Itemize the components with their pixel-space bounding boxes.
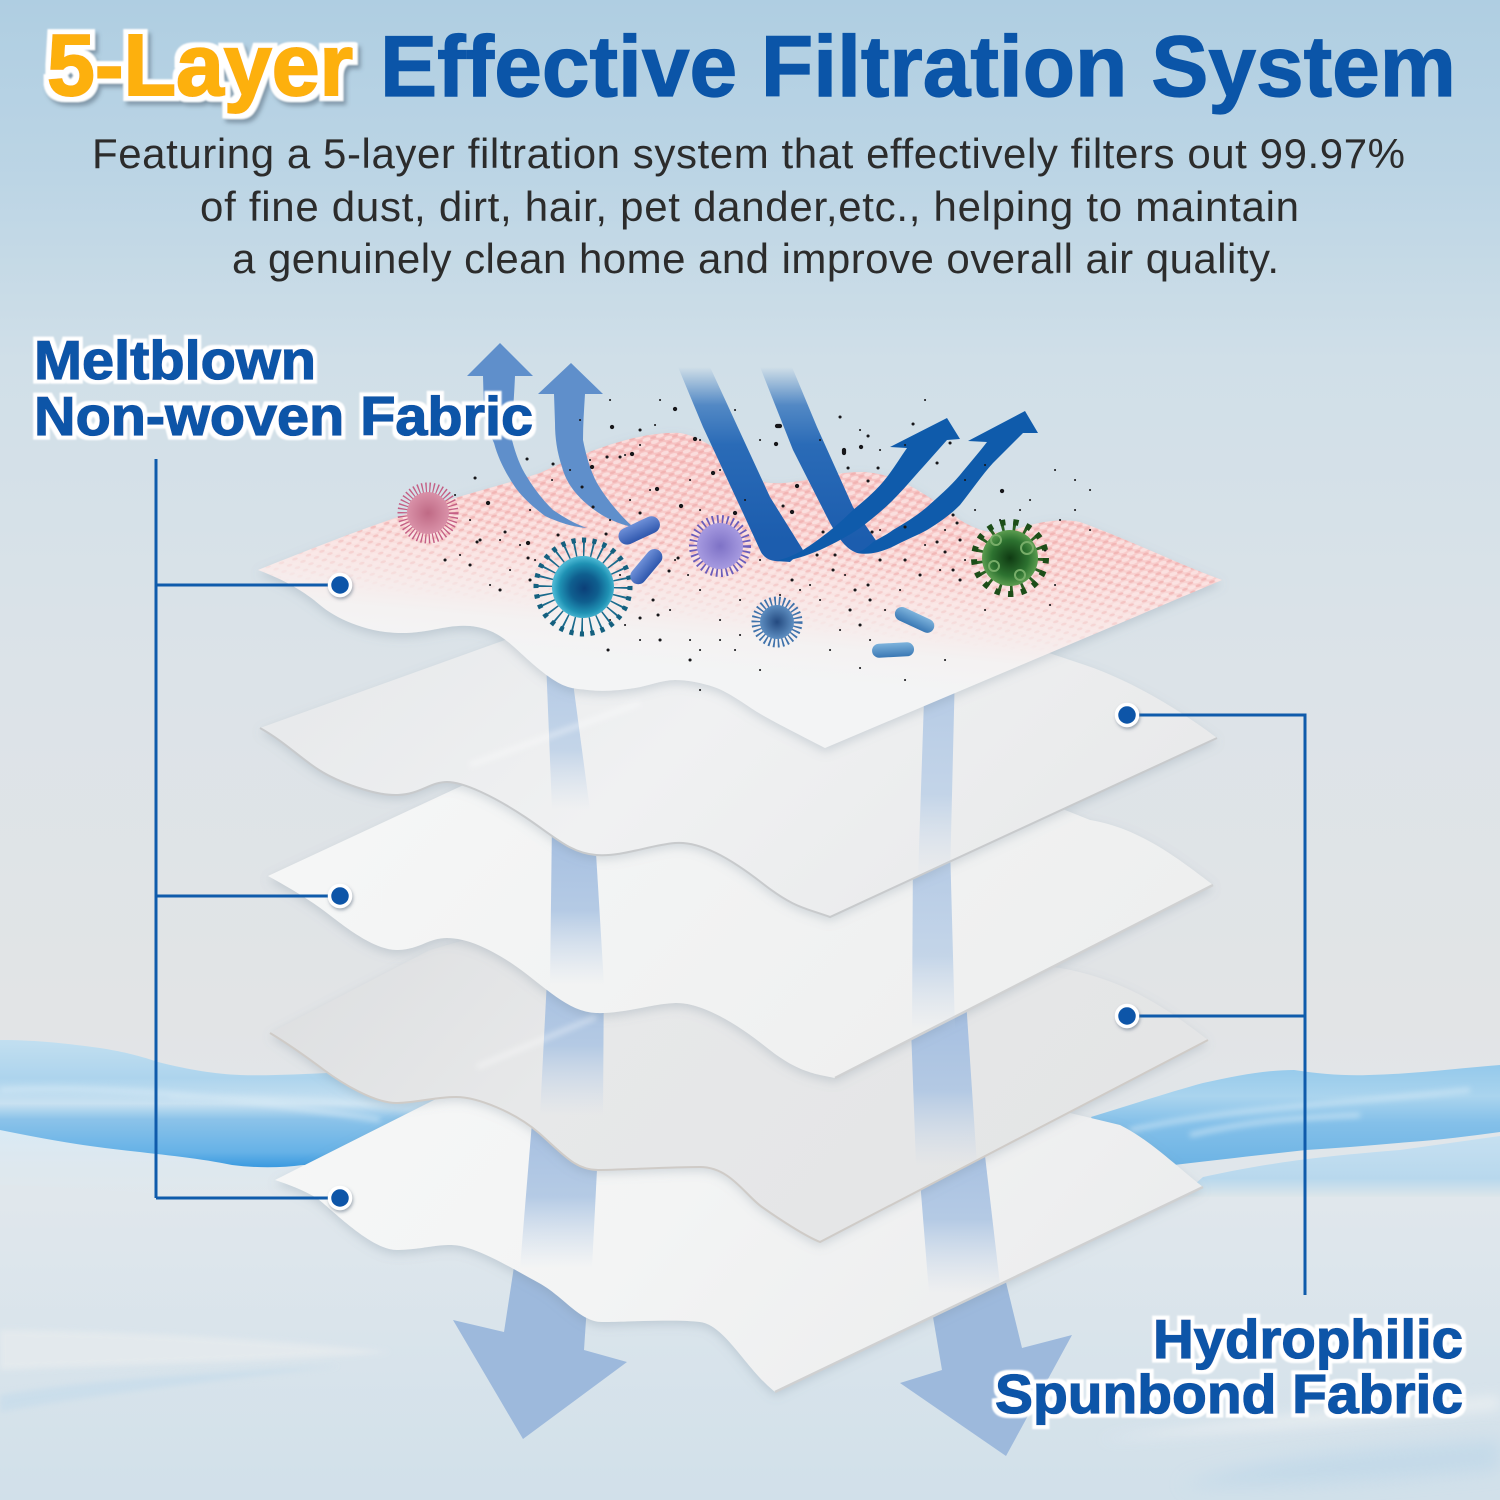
fabric highlights — [470, 703, 640, 1067]
title: Effective Filtration System — [380, 19, 1456, 115]
icon: bacterium 3 — [893, 605, 937, 635]
air stream between layers 3 and 4 — [540, 960, 977, 1165]
fabric layer 3: hydrophilic spunbond — [268, 782, 1213, 1078]
water waves background — [0, 1040, 1500, 1486]
arrow: filtered air out left — [453, 1260, 627, 1439]
air stream between layers 2 and 3 — [550, 820, 955, 1030]
fabric layer 2: meltblown — [260, 640, 1217, 917]
icon: bacterium 2 — [627, 546, 666, 587]
icon: green virus — [974, 522, 1046, 594]
intro text: a genuinely clean home and improve overall air quality. — [232, 235, 1279, 282]
icon: pink virus — [403, 488, 453, 538]
callout: spunbond connector — [1116, 704, 1305, 1295]
icon: large blue virus — [536, 540, 630, 634]
arrow: air flow in and out 2 — [760, 367, 1038, 554]
icon: bacterium 4 — [872, 642, 914, 658]
icon: bacterium 1 — [616, 513, 663, 547]
label: hydrophilic spunbond fabric: Spunbond Fabric — [995, 1363, 1463, 1425]
label: meltblown non-woven fabric: Meltblown — [34, 329, 316, 391]
fabric layer 1: meltblown pink contaminated surface — [258, 433, 1222, 748]
fabric layer 5: hydrophilic spunbond — [275, 1080, 1203, 1392]
callout: meltblown connector — [156, 459, 350, 1208]
fabric layer 4: meltblown — [270, 930, 1208, 1242]
title: 5-Layer — [47, 17, 353, 114]
label: meltblown non-woven fabric: Non-woven Fabric — [34, 385, 533, 447]
label: meltblown non-woven fabric — [34, 329, 533, 447]
air stream between layers 4 and 5 — [520, 1110, 1001, 1293]
arrow: rejected air up left 2 — [538, 363, 633, 527]
arrow: air flow in and out 1 — [678, 367, 960, 562]
intro text: of fine dust, dirt, hair, pet dander,etc., helping to maintain — [200, 183, 1299, 230]
air stream between layers 1 and 2 — [546, 660, 955, 878]
icon: steel blue virus — [756, 601, 798, 643]
dust particles — [445, 400, 1090, 690]
icon: purple virus — [694, 520, 746, 572]
intro text — [92, 130, 1405, 282]
label: hydrophilic spunbond fabric — [995, 1308, 1463, 1425]
arrow: filtered air out right — [900, 1270, 1072, 1456]
arrow: rejected air up left 1 — [467, 343, 587, 528]
label: hydrophilic spunbond fabric: Hydrophilic — [1153, 1308, 1463, 1370]
intro text: Featuring a 5-layer filtration system that effectively filters out 99.97% — [92, 130, 1405, 177]
